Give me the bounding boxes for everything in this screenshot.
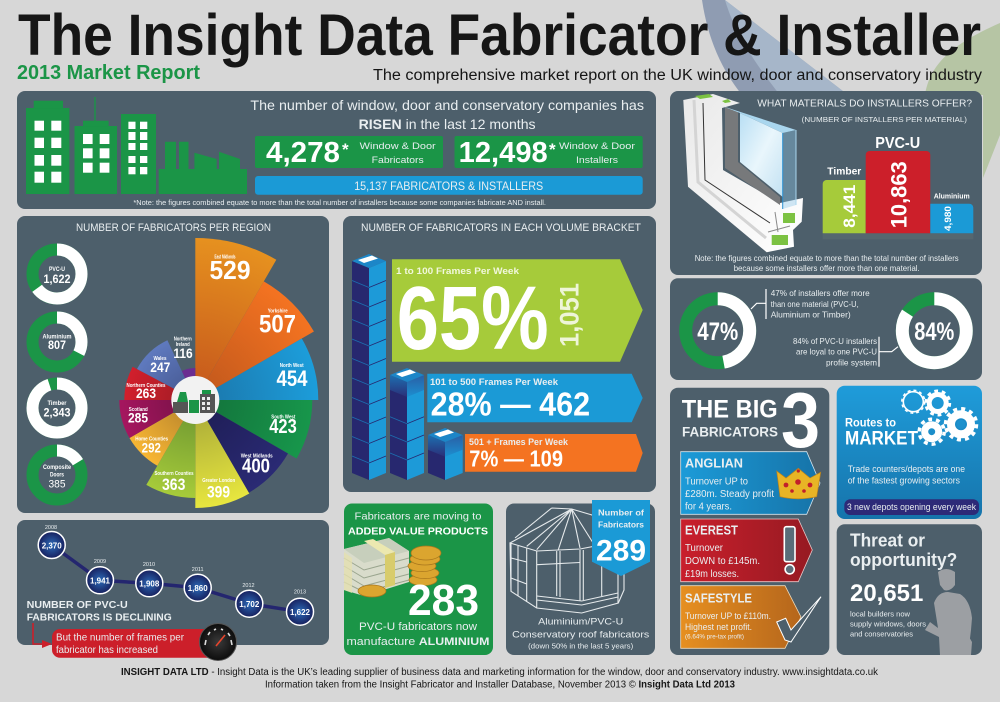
bar chart: materials: 10,863 bbox=[887, 161, 912, 228]
arrow: 101 to 500 frames: 28% — 462 bbox=[431, 386, 590, 423]
chart: regional rose bbox=[119, 238, 318, 508]
donut: composite doors bbox=[32, 450, 82, 500]
line chart: 2008 to 2013: 2,370 bbox=[42, 540, 62, 550]
heading: opportunity? bbox=[850, 550, 957, 570]
region labels: 529 bbox=[210, 255, 250, 285]
callout: 84 percent: profile system bbox=[826, 358, 877, 368]
icon: green buildings and factory bbox=[26, 97, 247, 194]
tower: medium bbox=[390, 368, 424, 480]
pill: new depots bbox=[844, 499, 979, 515]
region labels: Home Counties bbox=[135, 436, 168, 442]
line chart: 2008 to 2013: 1,908 bbox=[139, 579, 160, 589]
region labels: North West bbox=[280, 363, 304, 369]
line chart: 2008 to 2013: 2009 bbox=[94, 559, 106, 565]
panel: the big 3 bbox=[670, 376, 829, 655]
card: Everest: EVEREST bbox=[685, 523, 738, 537]
region labels: Scotland bbox=[129, 407, 148, 413]
card: Safestyle: Highest net profit. bbox=[685, 622, 752, 632]
note bbox=[695, 253, 959, 273]
heading: Threat or bbox=[850, 531, 925, 551]
donut: 84 percent bbox=[902, 299, 966, 363]
region labels: West Midlands bbox=[241, 454, 273, 460]
card: Anglian: £280m. Steady profit bbox=[685, 489, 774, 500]
heading: 3 bbox=[781, 376, 820, 464]
region labels: 423 bbox=[269, 416, 297, 438]
note: because some installers offer more than one material. bbox=[734, 263, 920, 273]
bar chart: materials: Aluminium bbox=[934, 194, 970, 200]
heading bbox=[850, 531, 957, 570]
heading: FABRICATORS bbox=[682, 424, 778, 440]
stat: window and door installers bbox=[454, 136, 643, 169]
icon: conservatory outline bbox=[510, 508, 624, 613]
big number 20,651: 20,651 bbox=[850, 580, 923, 607]
body text: local builders now bbox=[850, 610, 911, 618]
stat: window and door installers: Installers bbox=[576, 155, 618, 166]
line chart: 2008 to 2013: 1,622 bbox=[290, 607, 310, 617]
callout: 47 percent: than one material (PVC-U, bbox=[771, 299, 859, 309]
callout: 47 percent: Aluminium or Timber) bbox=[771, 310, 851, 320]
arrow: 1 to 100 frames: 1 to 100 Frames Per Week bbox=[396, 266, 520, 277]
donut: aluminium bbox=[32, 318, 82, 366]
heading text: The number of window, door and conservatory companies has bbox=[250, 97, 644, 113]
bar chart: materials bbox=[823, 135, 973, 239]
heading: THE BIG bbox=[682, 395, 778, 423]
icon: centre buildings bbox=[171, 376, 219, 424]
region labels: 507 bbox=[259, 310, 296, 338]
heading: Fabricators are moving to bbox=[354, 510, 482, 522]
heading: Routes to bbox=[845, 416, 896, 430]
heading: NUMBER OF FABRICATORS IN EACH VOLUME BRACKET bbox=[361, 222, 641, 234]
region labels: 363 bbox=[162, 475, 185, 494]
pill: new depots: 3 new depots opening every week bbox=[847, 502, 976, 512]
arrow: red bbox=[33, 623, 52, 648]
ribbon: number of fabricators bbox=[592, 500, 650, 576]
tower: short bbox=[428, 428, 463, 480]
note: Note: the figures combined equate to more than the total number of installers bbox=[695, 253, 959, 263]
heading bbox=[845, 416, 918, 449]
callout: 84 percent: are loyal to one PVC-U bbox=[796, 347, 877, 357]
donut: aluminium: Aluminium bbox=[42, 334, 72, 340]
icon: exclamation mark bbox=[784, 527, 795, 574]
donut: PVC-U: 1,622 bbox=[44, 272, 71, 286]
callout: frames per fabricator: fabricator has increased bbox=[56, 645, 158, 656]
stat: window and door installers: 12,498 bbox=[459, 137, 548, 169]
panel: companies risen bbox=[17, 91, 656, 209]
heading: NUMBER OF PVC-U bbox=[27, 599, 128, 611]
heading bbox=[27, 599, 172, 624]
card: Safestyle: SAFESTYLE bbox=[685, 592, 752, 606]
card: Anglian bbox=[681, 452, 821, 514]
footer: Information taken from the Insight Fabricator and Installer Database, November 2013 © Insight Data Ltd 2013 bbox=[265, 680, 735, 690]
footer: INSIGHT DATA LTD - Insight Data is the UK’s leading supplier of business data and marketing information for the window, door and conservatory industry. www.insightdata.co.uk bbox=[121, 667, 879, 678]
bar chart: materials: 8,441 bbox=[840, 185, 859, 228]
card: Safestyle: (6.64% pre-tax profit) bbox=[685, 635, 744, 641]
stat: window and door fabricators: Fabricators bbox=[372, 155, 424, 166]
card: Everest: DOWN to £145m. bbox=[685, 556, 760, 567]
caption: (down 50% in the last 5 years) bbox=[528, 642, 634, 650]
heading bbox=[348, 510, 488, 538]
region labels: Northern bbox=[174, 336, 192, 342]
panel: percentages bbox=[670, 278, 982, 380]
subtitle: 2013 market report: 2013 Market Report bbox=[17, 62, 200, 84]
donut: timber bbox=[32, 384, 82, 432]
line chart: 2008 to 2013: 2011 bbox=[192, 567, 204, 573]
caption: manufacture ALUMINIUM bbox=[346, 636, 489, 648]
callout: frames per fabricator bbox=[52, 629, 210, 658]
icon: check mark bbox=[777, 597, 821, 642]
region labels: South West bbox=[271, 414, 295, 420]
card: Safestyle: Turnover UP to £110m. bbox=[685, 611, 771, 621]
arrow: 1 to 100 frames: 1,051 bbox=[555, 283, 585, 347]
heading bbox=[757, 98, 972, 124]
stat: window and door installers: Window & Door bbox=[559, 141, 635, 152]
panel: volume bracket bbox=[343, 216, 656, 492]
line chart: 2008 to 2013: 2013 bbox=[294, 590, 306, 596]
region labels: 263 bbox=[136, 385, 156, 401]
stat: window and door fabricators bbox=[255, 136, 443, 169]
stat: window and door fabricators: Window & Door bbox=[360, 141, 436, 152]
heading text bbox=[250, 97, 644, 132]
card: Everest: Turnover bbox=[685, 543, 724, 554]
donut: 84 percent: 84% bbox=[914, 318, 954, 346]
heading: MARKET bbox=[845, 428, 918, 449]
caption: Aluminium/PVC-U bbox=[538, 616, 623, 628]
donut: composite doors: 385 bbox=[48, 478, 66, 490]
stat: window and door fabricators: 4,278 bbox=[266, 137, 340, 169]
stat: window and door installers: * bbox=[549, 140, 556, 159]
heading: (NUMBER OF INSTALLERS PER MATERIAL) bbox=[802, 115, 968, 124]
total bar: 15,137 FABRICATORS & INSTALLERS bbox=[354, 181, 544, 193]
donut: composite doors: Doors bbox=[50, 472, 65, 478]
region labels: Greater London bbox=[202, 478, 236, 484]
arrow: 101 to 500 frames bbox=[427, 374, 643, 423]
donut: timber: Timber bbox=[48, 401, 67, 407]
card: Anglian: for 4 years. bbox=[685, 502, 732, 512]
heading: ADDED VALUE PRODUCTS bbox=[348, 526, 488, 538]
heading text: RISEN in the last 12 months bbox=[359, 116, 536, 132]
donut: timber: 2,343 bbox=[44, 406, 71, 420]
card: Safestyle bbox=[681, 586, 821, 648]
caption: Conservatory roof fabricators bbox=[512, 630, 649, 640]
icon: speedometer gauge bbox=[200, 624, 236, 660]
body text bbox=[848, 464, 965, 486]
card: Anglian: ANGLIAN bbox=[685, 457, 743, 471]
footer bbox=[121, 667, 879, 690]
region labels: East Midlands bbox=[214, 254, 236, 260]
donut: 47 percent bbox=[686, 299, 750, 363]
stat: window and door fabricators: * bbox=[342, 140, 349, 159]
icon: tradesman silhouette bbox=[925, 569, 972, 655]
line chart: 2008 to 2013: 1,941 bbox=[90, 576, 110, 586]
heading: WHAT MATERIALS DO INSTALLERS OFFER? bbox=[757, 98, 972, 110]
big number 283: 283 bbox=[408, 576, 479, 625]
callout: frames per fabricator: But the number of frames per bbox=[56, 632, 185, 644]
panel: conservatory roof fabricators bbox=[506, 500, 655, 655]
line chart: 2008 to 2013: 2010 bbox=[143, 562, 155, 568]
body text: of the fastest growing sectors bbox=[848, 476, 960, 486]
ribbon: number of fabricators: 289 bbox=[596, 535, 646, 568]
icon: window frame section bbox=[683, 94, 803, 252]
donut: composite doors: Composite bbox=[43, 465, 72, 471]
region labels: 116 bbox=[173, 345, 193, 361]
bar chart: materials: Timber bbox=[827, 166, 861, 178]
icon: gears bbox=[902, 390, 976, 444]
arrow: 501 plus frames: 7% — 109 bbox=[469, 446, 563, 472]
donut: aluminium: 807 bbox=[48, 338, 66, 352]
bar chart: materials: PVC-U bbox=[875, 135, 920, 152]
arrow: 501 plus frames: 501 + Frames Per Week bbox=[469, 437, 569, 448]
region labels: 400 bbox=[242, 456, 270, 478]
icon: banknotes and coins bbox=[344, 538, 441, 597]
callout: 47 percent: 47% of installers offer more bbox=[771, 288, 870, 298]
region labels: 247 bbox=[150, 359, 170, 375]
total bar bbox=[255, 176, 643, 195]
callout: 84 percent: 84% of PVC-U installers bbox=[793, 336, 877, 346]
caption bbox=[346, 621, 489, 648]
arrow: 1 to 100 frames: 65% bbox=[397, 269, 549, 369]
footnote: *Note: the figures combined equate to more than the total number of installers because some companies fabricate AND install. bbox=[133, 200, 546, 207]
panel: materials bbox=[670, 91, 982, 275]
heading bbox=[682, 376, 820, 464]
callout: 47 percent bbox=[751, 288, 870, 320]
arrow: 101 to 500 frames: 101 to 500 Frames Per Week bbox=[430, 377, 559, 388]
donut: PVC-U: PVC-U bbox=[49, 267, 65, 273]
body text: and conservatories bbox=[850, 630, 913, 638]
heading: NUMBER OF FABRICATORS PER REGION bbox=[76, 222, 271, 234]
region labels: Southern Counties bbox=[154, 471, 194, 477]
region labels: Ireland bbox=[176, 342, 190, 348]
body text: supply windows, doors bbox=[850, 620, 926, 628]
card: Anglian: Turnover UP to bbox=[685, 476, 748, 488]
donut: 47 percent: 47% bbox=[697, 318, 738, 346]
ribbon: number of fabricators: Fabricators bbox=[598, 520, 644, 530]
line chart: 2008 to 2013: 1,702 bbox=[239, 599, 260, 609]
region labels bbox=[126, 254, 308, 502]
donut: PVC-U bbox=[32, 250, 82, 298]
body text bbox=[850, 610, 926, 638]
panel: routes to market bbox=[837, 386, 982, 519]
region labels: 285 bbox=[128, 410, 148, 426]
arrow: 1 to 100 frames bbox=[392, 259, 643, 369]
body text: Trade counters/depots are one bbox=[848, 464, 965, 474]
ribbon: number of fabricators: Number of bbox=[598, 508, 644, 518]
region labels: 399 bbox=[207, 482, 230, 502]
heading: FABRICATORS IS DECLINING bbox=[27, 612, 172, 624]
panel: fabricators per region bbox=[17, 216, 329, 513]
arrow: 501 plus frames bbox=[465, 434, 643, 472]
caption: PVC-U fabricators now bbox=[359, 621, 477, 633]
line chart: 2008 to 2013: 2008 bbox=[45, 525, 57, 531]
panel: added value products bbox=[344, 504, 493, 655]
region labels: 454 bbox=[276, 366, 308, 391]
bar chart: materials: 4,980 bbox=[943, 206, 953, 231]
line chart: 2008 to 2013: 2012 bbox=[242, 583, 255, 589]
region labels: Wales bbox=[154, 356, 166, 362]
panel: threat or opportunity bbox=[837, 524, 982, 655]
callout: 84 percent bbox=[793, 336, 898, 368]
caption bbox=[512, 616, 649, 650]
region labels: 292 bbox=[142, 440, 161, 456]
card: Everest bbox=[681, 519, 812, 582]
line chart: 2008 to 2013 bbox=[38, 525, 313, 625]
strapline: The comprehensive market report on the UK window, door and conservatory industry bbox=[373, 67, 982, 84]
card: Everest: £19m losses. bbox=[685, 569, 739, 580]
line chart: 2008 to 2013: 1,860 bbox=[188, 583, 208, 593]
icon: crown bbox=[777, 468, 821, 499]
panel: PVC-U decline bbox=[17, 520, 329, 660]
region labels: Northern Counties bbox=[126, 383, 166, 389]
tower: tall bbox=[352, 254, 386, 480]
region labels: Yorkshire bbox=[268, 308, 288, 314]
